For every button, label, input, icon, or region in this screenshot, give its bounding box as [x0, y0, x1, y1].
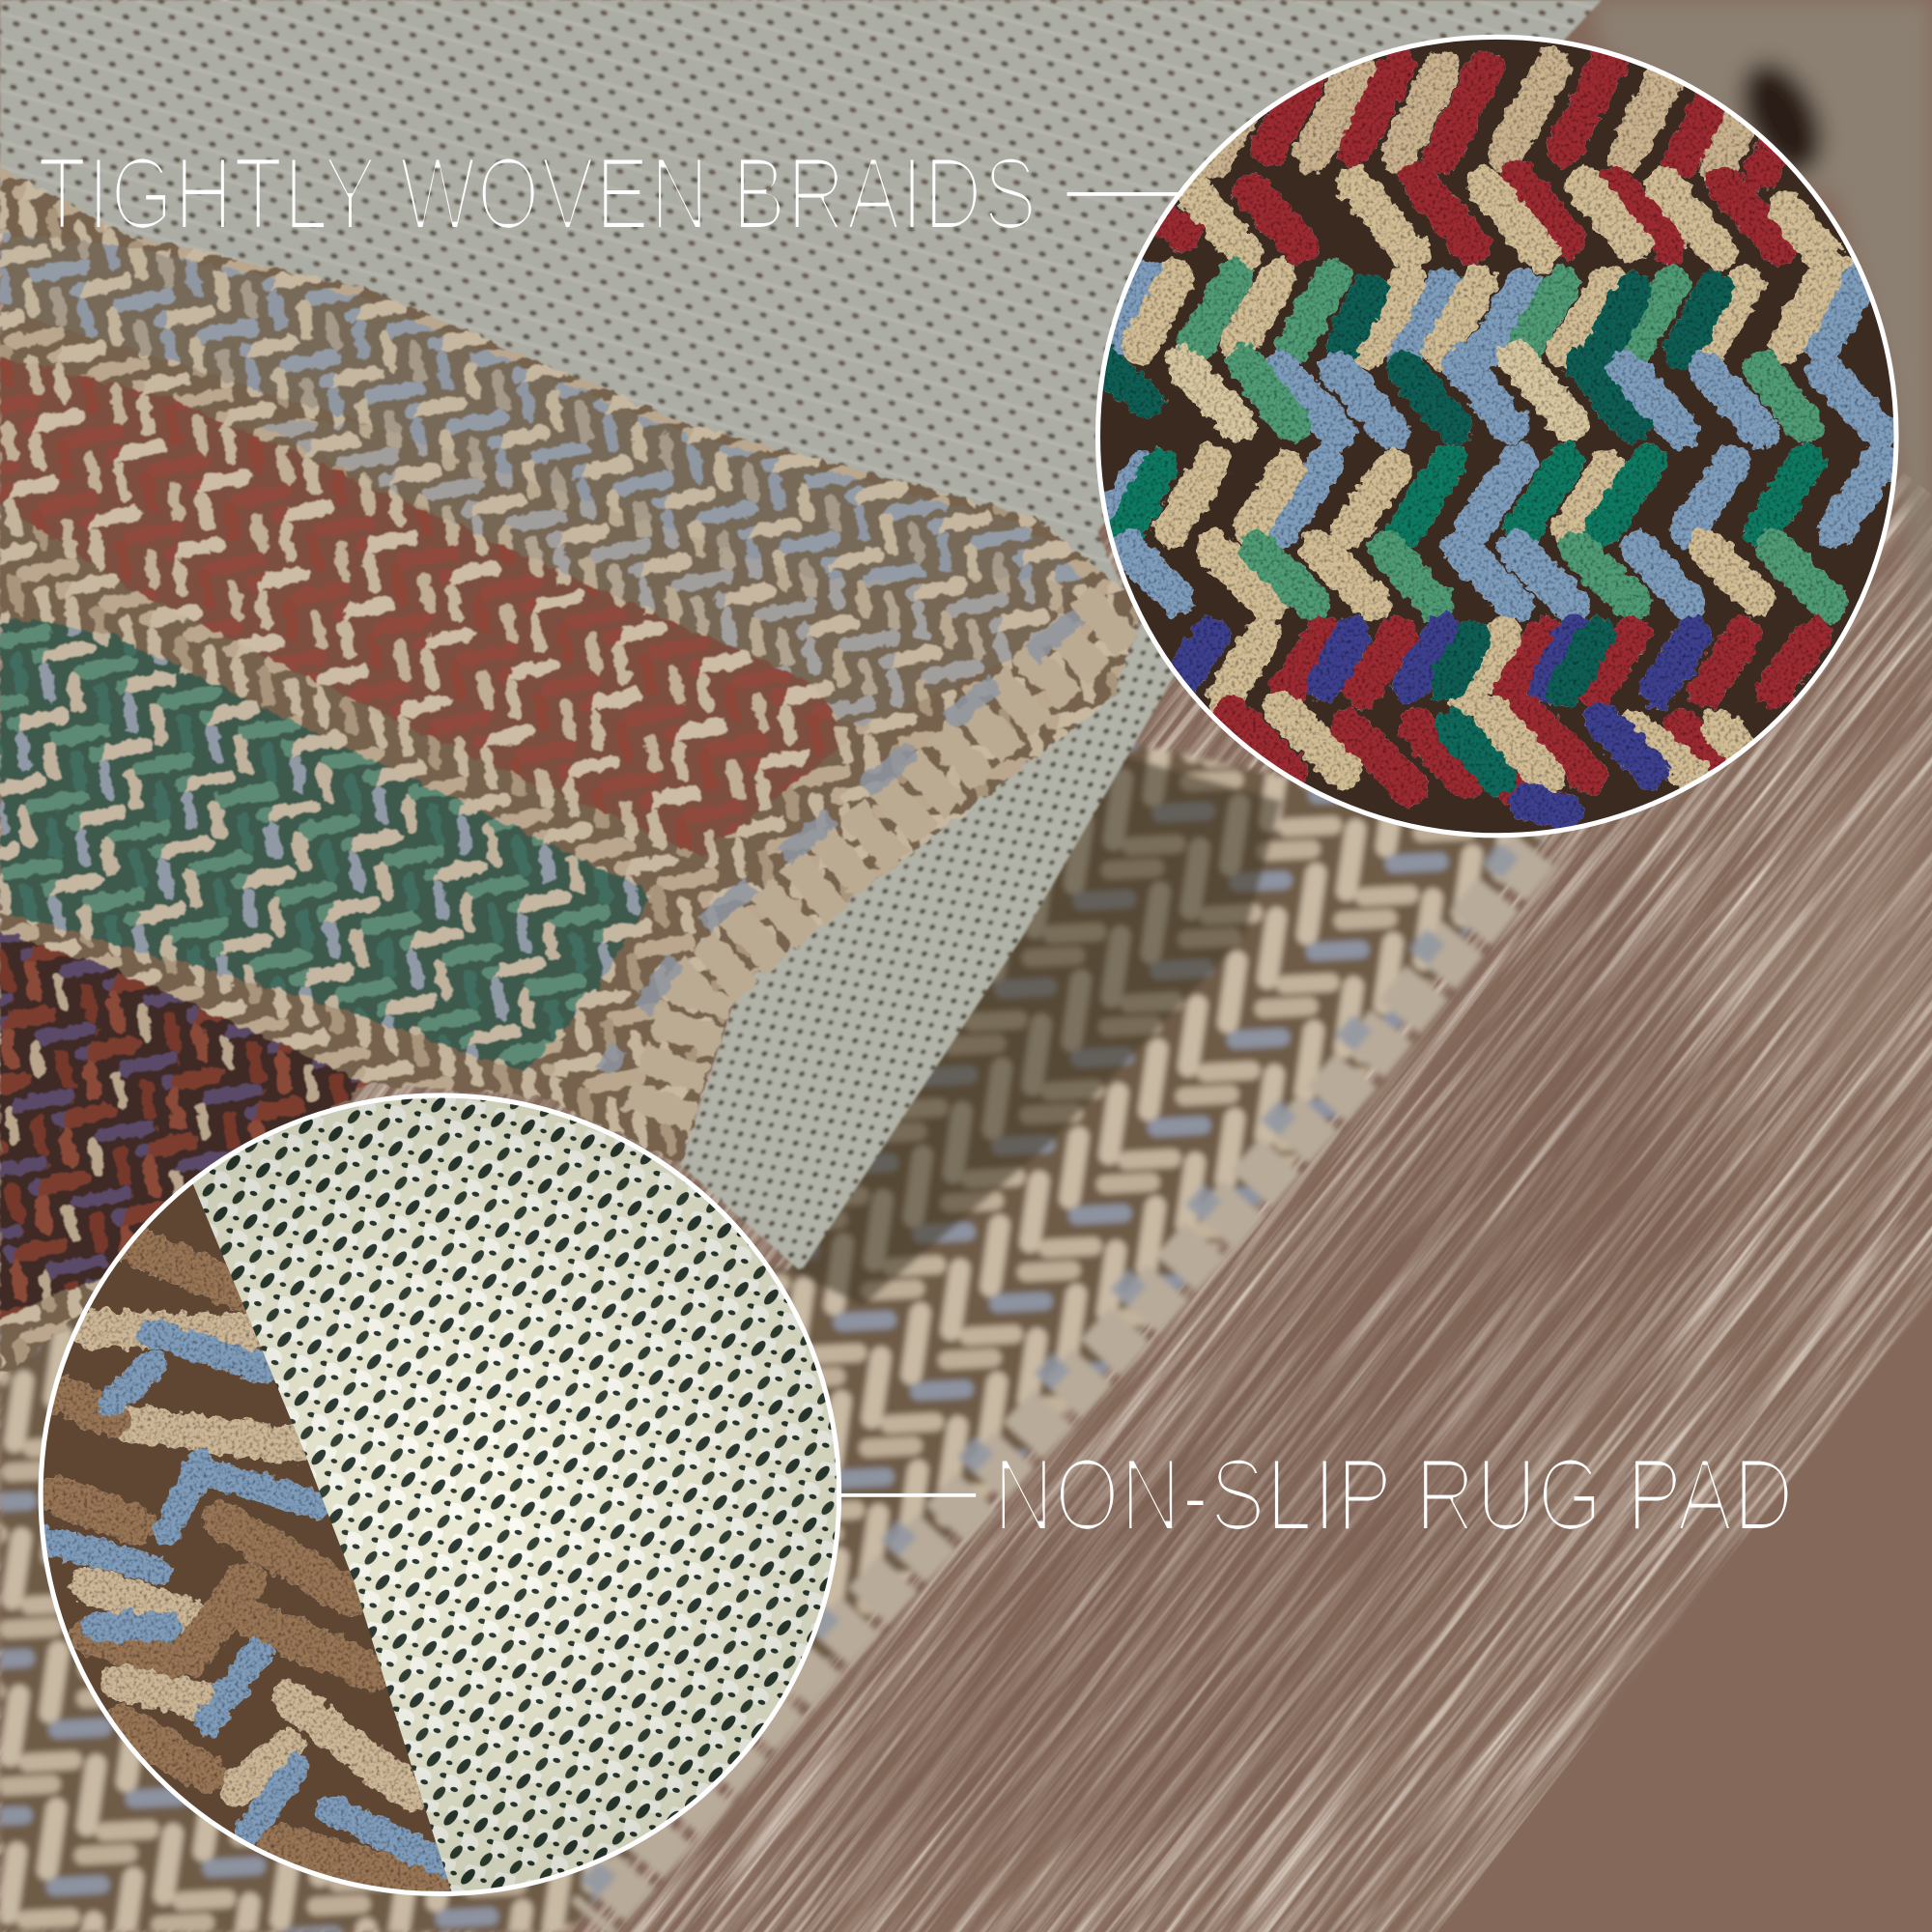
green band row four	[1127, 549, 1830, 604]
rug folded edge	[653, 610, 1115, 1127]
lower blurred rug layer	[0, 739, 1547, 1932]
rug rim	[591, 850, 1534, 1919]
dark red braid band	[0, 930, 370, 1319]
upper rug pad mesh	[0, 0, 1602, 690]
mesh pad close-up	[37, 1084, 850, 1910]
top red braid lower row	[1140, 179, 1836, 271]
lower rug body	[0, 739, 1547, 1932]
circle outline	[41, 1095, 839, 1893]
leader line: rug pad	[840, 1493, 976, 1497]
blurred rug edge top right	[1589, 0, 1932, 690]
blue strands	[48, 1333, 444, 1864]
braid cross-section	[25, 1158, 469, 1922]
callout circle: tightly woven braids	[1097, 37, 1896, 836]
leader line: braids	[1067, 192, 1182, 196]
tan strands	[88, 1328, 409, 1793]
lower red braid upper row	[1177, 632, 1814, 696]
lower red braid lower row	[1233, 708, 1756, 813]
green braid band	[0, 616, 653, 1072]
green band row two	[1103, 357, 1879, 431]
lower rug pad mesh	[680, 616, 1177, 1271]
red braid band	[0, 357, 850, 856]
callout circle: non-slip rug pad	[25, 1084, 850, 1922]
green band row three	[1103, 462, 1880, 529]
circle fill	[1099, 39, 1895, 835]
brown strands	[55, 1243, 431, 1884]
folded rug top	[0, 166, 1140, 1380]
circle outline	[1097, 37, 1896, 836]
shaded inner braid	[788, 752, 1282, 1306]
second blue-grey band	[246, 419, 1084, 727]
rug base	[0, 166, 1140, 1380]
circle fill	[42, 1096, 838, 1892]
top red braid upper row	[1213, 62, 1804, 173]
caption: tightly woven braids: TIGHTLY WOVEN BRAIDS	[37, 135, 1037, 251]
blue-grey top band	[0, 234, 1084, 579]
green band row one	[1115, 277, 1861, 352]
